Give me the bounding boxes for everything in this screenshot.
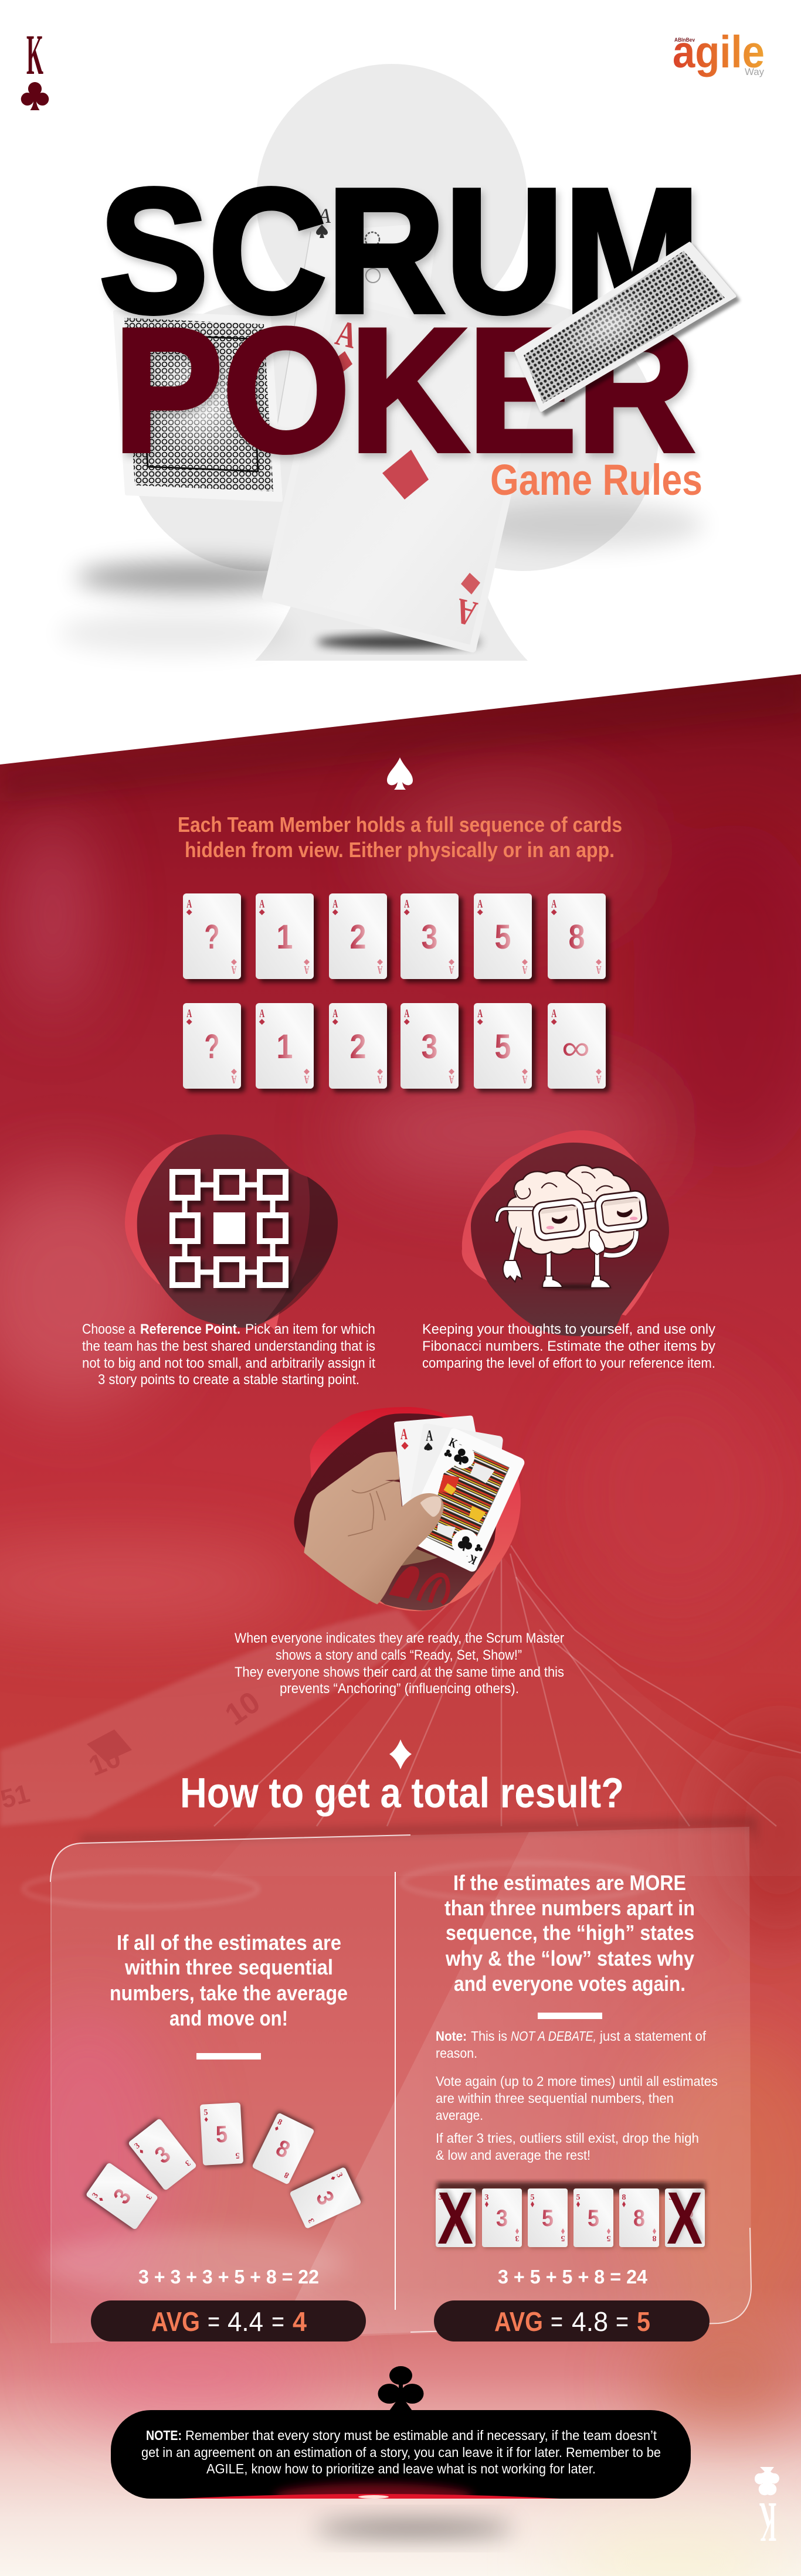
card: dropped 3: X: [440, 2174, 476, 2257]
note text: are within three sequential numbers, then: [436, 2091, 674, 2106]
card: 2: 2: [349, 918, 366, 956]
card: dropped 3: 3: [450, 2205, 461, 2231]
card: 2: 2: [349, 1028, 366, 1066]
card: 1: A: [304, 963, 310, 976]
glass panel shape: [41, 1817, 756, 2343]
card: 8: [619, 2188, 660, 2248]
card: 3: 3: [484, 2193, 489, 2202]
card: dropped 3: 3: [439, 2193, 442, 2202]
fan card 3: 3: [307, 2217, 317, 2224]
heading: each team member: hidden from view. Either physically or in an app.: [185, 838, 615, 862]
card: infinity: [548, 1003, 610, 1092]
card: 1: A: [304, 1073, 310, 1086]
card: infinity: ∞: [562, 1029, 590, 1067]
icon: brain with glasses: [497, 1165, 649, 1289]
logo: ABInBev agile way: ABInBev: [674, 37, 695, 43]
card: 3: [400, 1003, 463, 1092]
card: 3: 3: [496, 2205, 508, 2231]
right column heading: [444, 1871, 695, 1996]
card: 8: 8: [622, 2193, 626, 2202]
card: 5: [528, 2188, 569, 2248]
legs and shoes: [549, 1253, 597, 1277]
card: infinity: A: [596, 1073, 602, 1086]
fan card 3: 3: [311, 2187, 339, 2209]
text: ready set show: When everyone indicates they are ready, the Scrum Master: [235, 1630, 564, 1646]
card: dropped 13: 3: [668, 2193, 673, 2202]
left column heading: [110, 1931, 348, 2030]
heading: each team member: Each Team Member holds a full sequence of cards: [178, 813, 622, 837]
card: 5: [474, 1003, 536, 1092]
red glow: [179, 2478, 561, 2499]
fan card 8: 8: [276, 2118, 283, 2128]
ace of spades card: A: [426, 1427, 433, 1444]
king of clubs card: K: [447, 1435, 460, 1451]
text: K: [759, 2490, 776, 2554]
card: 1: [256, 1003, 318, 1092]
king and club corner mark: [21, 23, 49, 110]
fan card 3: [289, 2164, 363, 2229]
dark blob: [294, 1413, 498, 1610]
logo: ABInBev agile way: agile: [673, 27, 765, 77]
left average pill: [91, 2300, 366, 2341]
back card: ace of spades: A: [317, 204, 331, 227]
callout: final note: NOTE:: [146, 2428, 182, 2443]
red section background: [0, 674, 801, 2576]
card: 3: 3: [421, 1028, 437, 1066]
fan card 8: 8: [272, 2135, 294, 2163]
right average pill: =: [616, 2306, 629, 2337]
note text: Note:: [436, 2028, 467, 2044]
background cloth texture: [0, 674, 801, 2576]
text: choose a reference point: Pick an item for which: [245, 1321, 375, 1337]
note text: If after 3 tries, outliers still exist, drop the high: [436, 2130, 699, 2146]
ace of spades card: [410, 1423, 503, 1508]
card: 2: A: [377, 1073, 382, 1086]
king of clubs card: K: [466, 1552, 479, 1568]
card: 1: A: [259, 898, 265, 910]
right column heading: If the estimates are MORE: [453, 1871, 686, 1895]
card: 8: 8: [569, 918, 585, 956]
card: dropped 13: X: [669, 2174, 705, 2257]
callout: final note: get in an agreement on an estimation of a story, you can leave it if for later. Remember to be: [141, 2445, 661, 2460]
text: keeping your thoughts: comparing the level of effort to your reference item.: [422, 1355, 715, 1371]
flying card: [516, 243, 735, 410]
note text: average.: [436, 2108, 483, 2123]
fan card 3: 3: [334, 2171, 344, 2179]
left average pill: AVG: [151, 2306, 200, 2337]
left average pill: 4.4: [228, 2306, 263, 2337]
card: 1: [256, 893, 318, 983]
king of clubs card: [416, 1429, 524, 1571]
card: question mark: A: [186, 1007, 192, 1020]
heading: each team member: [178, 813, 622, 862]
fan card 3: 3: [108, 2184, 137, 2208]
card: 5: 5: [576, 2193, 581, 2202]
back card: ace of spades: [276, 204, 438, 434]
right column heading: sequence, the “high” states: [446, 1921, 694, 1945]
fan card 5: 5: [215, 2122, 228, 2147]
card: 3: [400, 893, 463, 983]
card: 5: 5: [588, 2205, 599, 2231]
card: 3: A: [449, 1073, 454, 1086]
fan card 3: 3: [150, 2141, 175, 2169]
left average pill: 4: [293, 2306, 307, 2337]
shadow beneath note: [314, 2521, 514, 2536]
right average pill: AVG: [494, 2306, 543, 2337]
card: question mark: ?: [204, 918, 219, 956]
callout: final note: [111, 2410, 691, 2509]
card: 5: 5: [542, 2205, 554, 2231]
card: 5: [573, 2188, 615, 2248]
fan card 3: [125, 2116, 197, 2192]
card: dropped 13: 3: [683, 2205, 694, 2231]
card: 5: A: [522, 963, 528, 976]
king and club corner mark: K: [26, 23, 43, 87]
card: 5: A: [477, 1007, 483, 1020]
card: 5: 5: [530, 2193, 535, 2202]
left column heading: and move on!: [169, 2006, 288, 2030]
right sum: 3 + 5 + 5 + 8 = 24: [498, 2266, 648, 2288]
card: 8: 8: [633, 2205, 645, 2231]
card: 5: 5: [606, 2234, 611, 2242]
icon: black club: [378, 2366, 423, 2411]
right divider bar: [538, 2013, 602, 2019]
left average pill: =: [271, 2306, 284, 2337]
right average pill: [434, 2300, 710, 2341]
background roulette wheel and card fan: [0, 1545, 801, 1906]
fan card 5: 5: [203, 2108, 208, 2118]
ace of diamonds card: A: [400, 1426, 408, 1443]
left sum: 3 + 3 + 3 + 5 + 8 = 22: [138, 2266, 319, 2288]
text: choose a reference point: the team has the best shared understanding that is: [82, 1338, 375, 1354]
card: question mark: ?: [204, 1028, 219, 1066]
panel: keep thoughts to yourself: [422, 1130, 715, 1371]
panel: ready set show: [235, 1407, 564, 1697]
fan card 8: [250, 2110, 315, 2185]
text: keeping your thoughts: Fibonacci numbers. Estimate the other items by: [422, 1338, 715, 1354]
card: 3: [482, 2188, 523, 2248]
silhouettes behind hand: [389, 1566, 419, 1599]
note text: This is: [471, 2028, 507, 2044]
right column heading: than three numbers apart in: [444, 1896, 695, 1920]
card: 2: A: [377, 963, 382, 976]
logo: ABInBev agile way: Way: [745, 66, 764, 77]
right average pill: 4.8: [572, 2306, 608, 2337]
note text: [436, 2028, 718, 2163]
card: 3: 3: [515, 2234, 520, 2242]
fan card 3: 3: [144, 2193, 153, 2201]
background roulette wheel and card fan: 10: [219, 1685, 266, 1732]
text: keeping your thoughts: Keeping your thoughts to yourself, and use only: [422, 1321, 715, 1337]
text: ready set show: shows a story and calls “Ready, Set, Show!”: [276, 1647, 522, 1663]
card: 5: [474, 893, 536, 983]
card: 3: A: [404, 1007, 410, 1020]
callout: final note: AGILE, know how to prioritize and leave what is not working for later.: [206, 2461, 596, 2476]
right column heading: why & the “low” states why: [445, 1946, 694, 1970]
text: ready set show: [235, 1630, 564, 1697]
card: 3: 3: [421, 918, 437, 956]
ace of diamonds card: [394, 1416, 476, 1507]
front card: ace of diamonds: A: [452, 590, 481, 634]
note text: NOT A DEBATE,: [511, 2028, 596, 2044]
fan card 3: 3: [183, 2158, 192, 2167]
hand holding cards illustration: [294, 1407, 524, 1611]
text: choose a reference point: [82, 1321, 375, 1388]
left average pill: =: [208, 2306, 220, 2337]
card: 8: 8: [652, 2234, 657, 2242]
fan card 3: 3: [133, 2142, 142, 2151]
left column heading: If all of the estimates are: [117, 1931, 341, 1955]
card: 2: [329, 893, 391, 983]
icon: white diamond: [389, 1739, 412, 1769]
text: ready set show: They everyone shows their card at the same time and this: [235, 1664, 564, 1680]
right column heading: and everyone votes again.: [454, 1972, 685, 1996]
card: 1: 1: [277, 1028, 293, 1066]
card: 5: 5: [561, 2234, 565, 2242]
card: infinity: A: [551, 1007, 557, 1020]
left column heading: within three sequential: [124, 1955, 333, 1979]
row of voted cards: [436, 2174, 706, 2259]
icon: white spade: [387, 757, 413, 790]
left column heading: numbers, take the average: [110, 1981, 348, 2005]
card: 2: A: [332, 898, 338, 910]
left divider bar: [196, 2053, 261, 2060]
card: 8: [548, 893, 610, 983]
panel: total result: [41, 1817, 756, 2343]
note text: just a statement of: [599, 2028, 707, 2044]
glasses: [497, 1190, 649, 1242]
callout: final note: Remember that every story must be estimable and if necessary, if the team doesn’t: [185, 2428, 657, 2443]
card: 2: A: [332, 1007, 338, 1020]
card: 3: A: [449, 963, 454, 976]
fan card 5: [200, 2102, 245, 2167]
fan card 8: 8: [283, 2170, 290, 2180]
back palm under card: [399, 1542, 438, 1566]
text: choose a reference point: Choose a: [82, 1321, 136, 1337]
card: dropped 13: X: [667, 2177, 702, 2259]
card: 3: A: [404, 898, 410, 910]
heading: how to get a total result: How to get a total result?: [180, 1770, 624, 1817]
note text: Vote again (up to 2 more times) until all estimates: [436, 2074, 718, 2089]
fan card 3: [83, 2161, 158, 2231]
large grey club background: [125, 64, 659, 661]
fan of cards: [83, 2102, 363, 2231]
left arm and glove: [511, 1227, 519, 1260]
right arm and pointing hand: [604, 1231, 636, 1255]
card: 1: 1: [277, 918, 293, 956]
card: 5: A: [522, 1073, 528, 1086]
fan card 5: 5: [235, 2150, 240, 2160]
fan card 3: 3: [91, 2191, 100, 2200]
card: 5: 5: [495, 1028, 511, 1066]
text: ready set show: prevents “Anchoring” (influencing others).: [280, 1681, 519, 1697]
inverted club and king mark: [755, 2467, 779, 2554]
icon: reference grid: [172, 1172, 286, 1285]
text: choose a reference point: 3 story points to create a stable starting point.: [98, 1372, 359, 1388]
card: question mark: [183, 1003, 245, 1092]
card: question mark: A: [231, 963, 237, 976]
subtitle Game Rules: Game Rules: [490, 456, 702, 504]
card: 8: A: [551, 898, 557, 910]
card row one: [183, 893, 610, 983]
title word POKER: POKER: [114, 291, 695, 488]
hand: [304, 1452, 444, 1605]
card: 8: A: [596, 963, 602, 976]
brain body: [507, 1165, 637, 1255]
text: choose a reference point: Reference Point.: [140, 1321, 240, 1337]
blob behind icon: [125, 1134, 338, 1331]
card: 1: A: [259, 1007, 265, 1020]
title word SCRUM: SCRUM: [99, 152, 700, 349]
panel: reference point: [82, 1134, 375, 1388]
text: choose a reference point: not to big and not too small, and arbitrarily assign it: [82, 1355, 375, 1371]
card: 5: 5: [495, 918, 511, 956]
blob behind brain: [462, 1130, 669, 1336]
eyes and cheeks: [552, 1209, 633, 1224]
background roulette wheel and card fan: 10: [84, 1742, 125, 1782]
right average pill: 5: [637, 2306, 650, 2337]
right average pill: =: [551, 2306, 563, 2337]
front card: ace of diamonds: [266, 296, 541, 649]
card: 2: [329, 1003, 391, 1092]
card: 5: A: [477, 898, 483, 910]
back card: patterned: [115, 312, 281, 500]
card: dropped 3: X: [437, 2177, 473, 2259]
note text: reason.: [436, 2045, 477, 2061]
ground shadows: [59, 501, 704, 654]
note text: & low and average the rest!: [436, 2147, 590, 2163]
light blob: [310, 1407, 521, 1611]
card row two: [183, 1003, 610, 1092]
hero artwork: [59, 64, 735, 661]
card: question mark: [183, 893, 245, 983]
card: question mark: A: [186, 898, 192, 910]
front card: ace of diamonds: A: [332, 313, 361, 356]
card: question mark: A: [231, 1073, 237, 1086]
text: keeping your thoughts: [422, 1321, 715, 1371]
